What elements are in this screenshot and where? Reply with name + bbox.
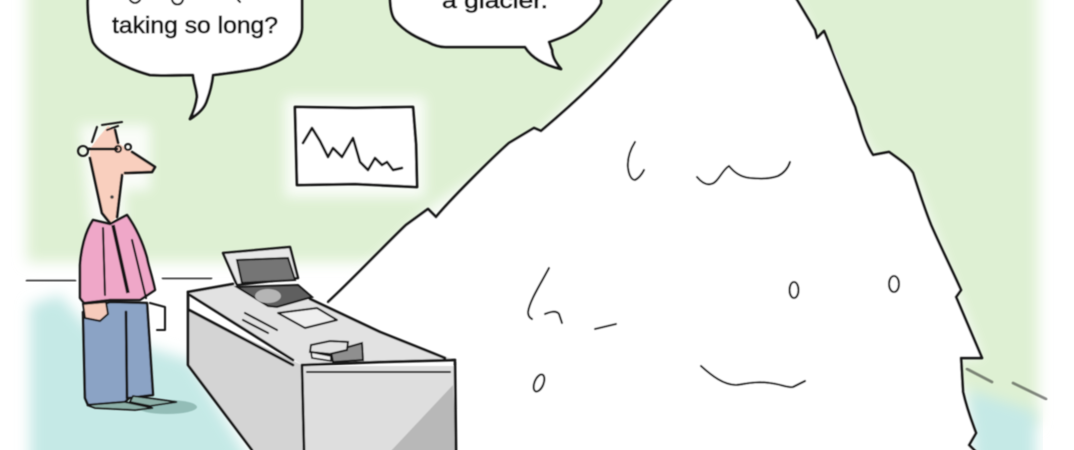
- head and neck: [90, 126, 155, 223]
- man standing: [78, 122, 197, 414]
- desk side panel: [188, 310, 304, 450]
- speech text: manager: taking so long?: [112, 12, 278, 38]
- shirt: [80, 215, 155, 303]
- desk top: [188, 284, 455, 365]
- glacier surface marks: [528, 142, 899, 393]
- paper on desk: [278, 308, 337, 328]
- desk front shadow: [390, 385, 456, 450]
- glasses: [88, 148, 117, 150]
- cut-off first line of speech: [130, 0, 240, 4]
- desk front panel: [302, 366, 456, 450]
- wall picture: line chart: [295, 107, 417, 187]
- hair: [92, 122, 122, 142]
- shoes: [87, 396, 177, 410]
- glacier: [310, 0, 982, 450]
- papers on desk edge: [243, 313, 277, 333]
- tie: [113, 225, 128, 293]
- desk: [188, 247, 456, 450]
- shadow: [137, 400, 197, 414]
- books: [310, 341, 363, 362]
- paper in hand: [150, 303, 165, 330]
- background: teal floor left: [30, 295, 255, 450]
- trousers: [83, 302, 153, 405]
- laptop: [223, 247, 312, 307]
- floor line behind glacier: [967, 369, 1046, 399]
- background: teal floor right: [968, 390, 1036, 450]
- left hand: [83, 302, 108, 321]
- wall and floor lines: [27, 278, 211, 281]
- speech bubble: manager: [88, 0, 302, 119]
- speech bubble: reply: [390, 0, 601, 69]
